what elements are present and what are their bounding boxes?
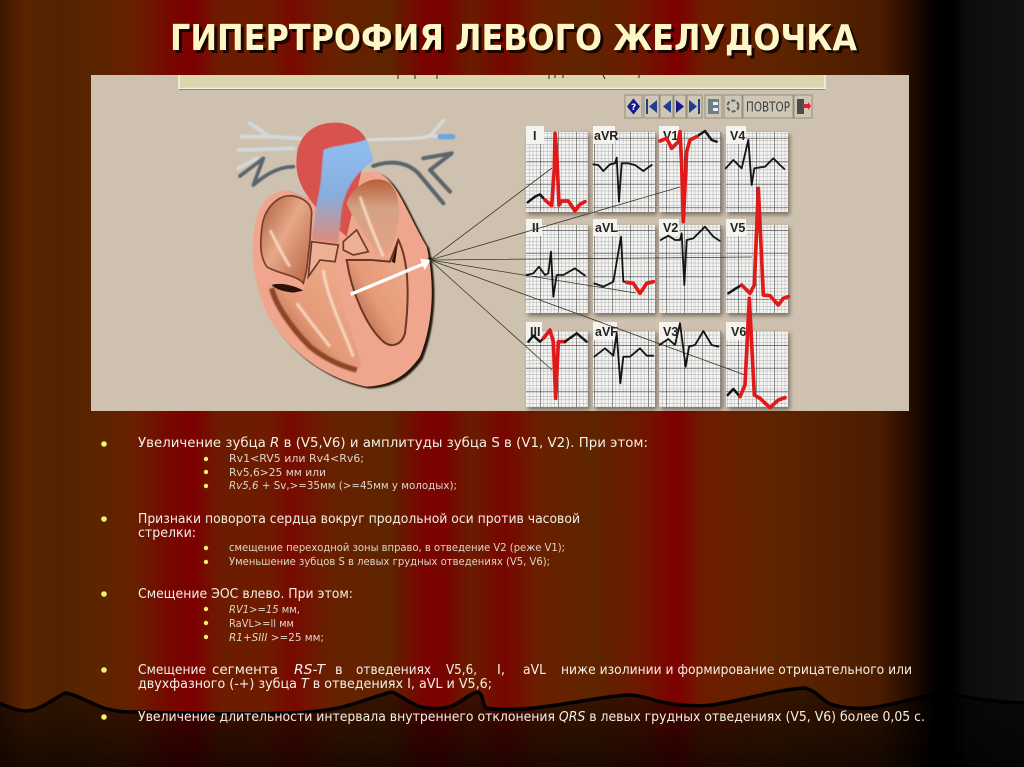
item: RS-T shift: ниже изолинии и формирование отрицательного или (561, 663, 912, 678)
lead rays (428, 168, 752, 375)
navigation buttons: ? (631, 103, 636, 113)
aorta (296, 123, 367, 237)
ECG lead panels: V6 (731, 325, 746, 339)
title: ГИПЕРТРОФИЯ ЛЕВОГО ЖЕЛУДОЧКА (170, 18, 857, 59)
item: rotation signs: стрелки: (138, 526, 196, 541)
item: RS-T shift: Смещение (138, 663, 206, 678)
item: axis shift: Смещение ЭОС влево. При этом: (138, 587, 353, 602)
item: RS-T shift: aVL (523, 663, 547, 678)
item: RS-T shift: двухфазного (-+) зубца T в отведениях I, aVL и V5,6; (138, 677, 492, 692)
ECG lead panels: aVL (595, 221, 618, 235)
dark wavy floor (0, 688, 1024, 767)
left ventricle (347, 240, 408, 345)
ECG lead panels (526, 126, 790, 410)
white arrow (351, 259, 431, 294)
item: RS-T shift: отведениях (356, 663, 431, 678)
item: rotation signs: смещение переходной зоны вправо, в отведение V2 (реже V1); (229, 542, 565, 554)
ECG lead panels: V5 (730, 221, 745, 235)
right ventricle (272, 263, 362, 370)
item: RS-T shift (101, 663, 912, 692)
item: rotation signs: Признаки поворота сердца вокруг продольной оси против часовой (138, 512, 580, 527)
bullet list (101, 436, 925, 725)
item: rotation signs: Уменьшение зубцов S в левых грудных отведениях (V5, V6); (229, 556, 550, 568)
ECG lead panels: V2 (663, 221, 678, 235)
ECG lead panels: III (530, 325, 540, 339)
software toolbar strip (179, 75, 825, 90)
panel: ECG illustration (91, 75, 909, 411)
item: axis shift: RaVL>=ll мм (229, 618, 294, 630)
item: RS-T shift: в (335, 663, 343, 678)
item: R wave increase: Rv5,6 + Sv,>=35мм (>=45мм у молодых); (229, 480, 457, 492)
item: rotation signs (101, 512, 580, 568)
item: RS-T shift: I, (497, 663, 505, 678)
left atrium (347, 179, 399, 262)
navigation buttons: ПОВТОР (746, 100, 790, 116)
item: axis shift: RV1>=15 мм, (229, 604, 300, 616)
right atrium (261, 196, 312, 283)
item: RS-T shift: RS-T (294, 663, 326, 678)
ECG lead panels: II (532, 221, 539, 235)
heart shadow (255, 173, 434, 389)
ECG lead panels: V4 (730, 129, 745, 143)
heart diagram (238, 121, 453, 389)
ECG lead panels: aVR (594, 129, 618, 143)
heart body (253, 172, 432, 387)
ECG lead panels: aVF (595, 325, 618, 339)
septal highlights (270, 197, 383, 357)
item: axis shift: R1+SIII >=25 мм; (229, 632, 324, 644)
ECG lead panels: V1 (663, 129, 678, 143)
item: R wave increase: Rv1<RV5 или Rv4<Rv6; (229, 453, 364, 465)
item: axis shift (101, 587, 353, 644)
item: R wave increase: Увеличение зубца R в (V5,V6) и амплитуды зубца S в (V1, V2). При этом: (138, 436, 648, 451)
valves (308, 230, 368, 277)
ECG lead panels: I (533, 129, 536, 143)
item: R wave increase: Rv5,6>25 мм или (229, 467, 326, 479)
item: QRS interval: Увеличение длительности интервала внутреннего отклонения QRS в левых грудных отведениях (V5, V6) более 0,05 с. (138, 710, 925, 725)
item: RS-T shift: V5,6, (446, 663, 477, 678)
item: R wave increase (101, 436, 648, 492)
item: RS-T shift: сегмента (212, 663, 278, 678)
vessels (238, 121, 453, 203)
ECG traces (527, 131, 788, 408)
pulmonary trunk (312, 139, 374, 243)
title: ГИПЕРТРОФИЯ ЛЕВОГО ЖЕЛУДОЧКА (173, 21, 860, 62)
navigation buttons (625, 95, 812, 118)
ECG lead panels: V3 (663, 325, 678, 339)
